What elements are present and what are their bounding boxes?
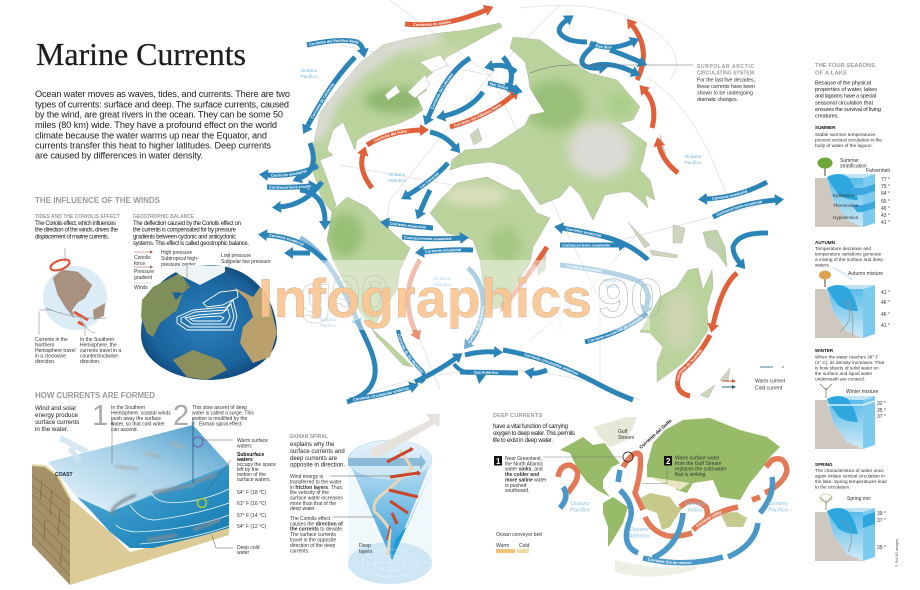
annotation: northern hemisphere: Northern [35,342,55,348]
block labels [236,438,276,556]
season: summer: Fahrenheit [866,168,891,174]
text: lake intro: ensures the survival of living [815,107,881,113]
text: Ekman explanation: explains why the [290,442,335,448]
annotation: southern hemisphere: currents travel in a [80,348,121,354]
map: conveyor belt: Gulf [618,429,628,435]
map: conveyor belt: Corriente cálida [696,511,722,528]
ocean labels: Atlántico [388,178,407,184]
text: lake intro: Because of the physical [815,80,871,86]
conveyor belt legend: Cold [519,543,530,549]
warm currents: Corriente de Australia [676,350,702,380]
world map: surface currents [258,0,784,404]
cold currents: Corriente del Labrador [431,73,454,109]
legend: force arrows: Low pressure [221,253,251,259]
panel: four seasons of a lake [815,63,899,567]
panel: influence of the winds [35,196,277,380]
watermark: 90 [597,267,663,329]
season: summer [815,125,891,227]
block labels: Subsurface [237,452,264,458]
text: deep currents intro: DEEP CURRENTS [493,413,542,419]
season: winter: the surface and liquid water [815,371,873,376]
season: winter [815,348,886,449]
text: Ekman explanation: the velocity of the [290,490,329,496]
cold currents: Corriente occidental de Australia [588,316,643,342]
season: spring: The characteristics of water once [815,468,884,473]
season: summer: stratification [840,164,867,170]
block labels: waters [237,444,252,450]
season: winter: 37 ° [877,414,886,420]
step 2: This slow ascent of deep [192,405,247,411]
season: autumn: 41 ° [881,323,890,329]
step 1: push away the surface [111,416,161,422]
cold currents: Oya Shio [596,44,612,49]
season: summer: prevent vertical circulation in the [815,138,882,142]
step 2: 2. [173,400,197,432]
callout 2: that is sinking. [675,472,707,478]
text: deep currents intro [493,413,575,444]
cold currents: Corriente ecuatorial [390,222,426,229]
step 2: Ekman spiral effect. [199,422,243,428]
conveyor belt legend: Warm [496,543,509,549]
map: conveyor belt: Índico [688,506,702,514]
cold currents: Corriente ecuatorial [271,169,307,177]
step 1: water, so that cold water [111,422,165,428]
cold currents: Mar Ártico [490,82,508,90]
season: winter: Winter mixture [846,389,878,395]
ocean labels: Pacífico [319,323,337,329]
ocean labels [300,68,702,329]
step 1 [92,400,171,433]
annotation: southern hemisphere [80,337,121,365]
warm currents: Corriente del Atlántico Norte [454,104,502,127]
step 1: Hemisphere, coastal winds [111,410,171,416]
watermark: Infographics [258,267,592,329]
season: summer: 55 ° [881,199,890,205]
text: deep currents intro: oxygen to deep water. This permits [493,431,575,437]
callout 2 [664,456,727,478]
season: autumn [815,240,890,338]
step 2 [173,400,254,432]
text: lake intro: and lagoons have a special [815,94,876,100]
intro text: Ocean water moves as waves, tides, and currents. There are two [35,89,290,99]
text: geostrophic balance [133,214,249,247]
map: conveyor belt: Pacífico [570,508,590,514]
subpolar arctic callout: CIRCULATING SYSTEM [697,70,754,76]
season: autumn: 46 ° [881,312,890,318]
intro text: by the wind, are great rivers in the ocean. They can be some 50 [35,110,283,120]
season: summer: Summer [840,158,859,164]
cold currents: Corriente del Pacífico Norte [309,39,359,46]
block labels: 61° F (16 °C) [237,501,267,507]
ocean labels: Océano [434,276,451,282]
text: tides and Coriolis effect [35,214,120,240]
legend: force arrows [134,250,271,291]
text: geostrophic balance: systems. This effect is called geostrophic balance. [133,241,249,247]
subpolar arctic callout: shown to be undergoing [697,90,753,96]
callout 2: Warm surface water [675,456,720,462]
text: Ekman explanation: opposite in direction. [290,462,345,468]
text: Ekman explanation: deep currents are [290,456,338,462]
cone diagram: layers [359,549,373,555]
block labels: 54° F (12 °C) [237,524,267,530]
legend: force arrows: Coriolis [134,255,151,261]
map legend [722,367,786,392]
warm currents: Corriente del Golfo [374,130,407,142]
callout 1: 1 [496,457,501,466]
legend: force arrows: gradient [134,275,153,281]
panel: how currents are formed: HOW CURRENTS ARE FORMED [35,391,155,400]
season: spring: Spring mix [847,496,871,502]
ocean labels: Océano [320,317,337,323]
block labels: 57° F (14 °C) [237,513,267,519]
legend: force arrows: High pressure [161,250,192,256]
cold currents: Corriente circumpolar antártica [353,387,409,401]
text: Ekman explanation: currents. [290,548,309,554]
legend: force arrows: Subtropical high- [161,256,199,262]
cold currents: Las Canarias [419,172,439,188]
watermark: g90 [300,266,390,324]
cold currents: Contracorriente ecuatorial [562,244,610,246]
annotation: northern hemisphere [35,337,76,365]
cold currents: Corriente de las Malvinas [398,334,424,373]
season: winter: WINTER [815,348,834,353]
map: conveyor belt: Océano [768,501,788,507]
text: tides and Coriolis effect: TIDES AND THE CORIOLIS EFFECT [35,214,120,220]
season: autumn: 41 ° [881,290,890,296]
cold currents: Corriente ecuatorial [566,228,602,238]
block labels: water [237,550,250,556]
season: spring: 39 ° [877,511,886,517]
season: summer: SUMMER [815,125,836,130]
map legend: Cold current [755,386,783,392]
conveyor belt legend [496,532,542,553]
callout 1: more saline water [505,478,547,484]
season: summer: Hypolimnion [833,215,859,220]
text: Ekman explanation: the currents to deviate. [290,526,343,532]
season: autumn: Temperature decrease and [815,246,871,251]
panel: deep currents [493,413,790,576]
season: summer: 75 ° [881,184,890,190]
text: Ekman explanation: direction of the deep [290,543,336,549]
legend: force arrows: Subpolar low pressure [221,259,271,265]
annotation: southern hemisphere: In the Southern [80,337,114,343]
text: Ekman explanation: transferred to the water [290,480,342,486]
season: spring: the lake. Spring temperatures lead [815,479,887,484]
annotation: southern hemisphere: Hemisphere, the [80,342,117,348]
season: summer: Thermocline [833,203,859,208]
text: wind and solar [35,405,79,433]
callout 1: the colder and [505,472,539,478]
block labels: left by the [237,467,259,473]
map: conveyor belt: Stream [618,435,634,441]
ocean labels: Océano [604,278,621,284]
season: summer: 46 ° [881,206,890,212]
legend: force arrows: Winds [134,285,148,291]
warm currents: Corrientes de Alaska [413,20,451,26]
season: winter: When the water reaches 39° F [815,354,879,360]
season: winter: is how sheets of solid water on [815,366,879,370]
text: Ekman explanation: more than that of the [290,501,336,507]
cold currents: Contracorriente ecuatorial [716,200,762,216]
text: Ekman explanation: deep water. [290,506,316,512]
cold currents: Corriente de California [311,84,334,118]
annotation: southern hemisphere: direction. [80,359,100,365]
text: tides and Coriolis effect: The Coriolis effect, which influences [35,221,116,227]
callout 1: water sinks, and [505,466,543,472]
text: Ekman explanation: The Coriolis effect [290,516,331,522]
annotation: northern hemisphere: in a clockwise [35,354,66,360]
intro text: are caused by differences in water density. [35,150,203,160]
panel: influence of the winds: THE INFLUENCE OF THE WINDS [35,196,161,205]
cold currents: Corriente ecuatorial [269,234,304,246]
text: Ekman explanation: travel in the opposite [290,538,336,544]
step 1: In the Southern [111,405,145,411]
season: winter: 35 ° [877,408,886,414]
conveyor belt legend: Ocean conveyor belt [496,532,542,538]
intro text [35,89,290,160]
title: Marine Currents [36,36,246,72]
season: winter: underneath are created. [815,376,865,382]
arctic islands [385,55,448,100]
text: geostrophic balance: The deflection caused by the Coriolis effect on [133,221,241,227]
map legend: Warm current [755,378,786,384]
callout 1: southward. [505,488,529,494]
text: wind and solar: energy produce [35,412,79,419]
cold currents: Corriente circumpolar antártica [524,354,578,376]
small globe illustration [39,248,107,336]
subpolar arctic callout: SUBPOLAR ARCTIC [697,64,754,70]
map: conveyor belt [543,417,790,576]
callout 1: is pushed [505,483,527,489]
white veil under watermark [258,260,650,330]
season: summer: 77 ° [881,177,890,183]
annotation: southern hemisphere: counterclockwise [80,354,118,360]
panel: Ekman spiral [290,414,440,584]
text: lake intro: properties of water, lakes [815,87,877,93]
copyright: © Sol 90 Images [895,539,899,567]
cone diagram: Deep [359,543,371,549]
season: summer: 43 ° [881,213,890,219]
ocean block diagram [32,418,233,585]
text: Ekman explanation: EKMAN SPIRAL [290,434,328,440]
callout 2: replaces the cold water [675,466,727,472]
season: summer: body of water of the lagoon. [815,143,873,148]
annotation: northern hemisphere: Hemisphere travel [35,348,76,354]
text: tides and Coriolis effect: the direction of the winds, drives the [35,228,119,234]
ocean labels: Océano [685,154,702,160]
text: Ekman explanation [290,434,345,554]
cone diagram [330,414,440,584]
subpolar arctic callout [530,64,756,103]
cold currents: Corriente ecuatorial [566,264,602,272]
ocean block diagram: COAST [55,472,72,478]
cold currents: Corriente ecuatorial [712,190,748,200]
text: Ekman explanation: The surface currents [290,532,336,538]
annotation: northern hemisphere: direction. [35,359,55,365]
block labels: Deep cold [237,545,260,551]
panel: how currents are formed [32,391,276,585]
subpolar arctic callout: For the last five decades, [697,78,756,84]
season: summer: 64 ° [881,191,890,197]
intro text: miles (80 km) wide. They have a profound effect on the world [35,120,277,130]
step 1: can ascend. [111,427,138,433]
season: spring: 37 ° [877,518,886,524]
cold currents [141,15,784,436]
text: Ekman explanation: causes the direction of [290,522,343,528]
season: autumn: a mixing of the surface and deep [815,257,883,262]
block labels: motion of the [237,472,266,478]
text: tides and Coriolis effect: displacement of marine currents. [35,234,109,240]
block labels: surface waters. [237,477,271,483]
step 2: water is called a surge. This [192,410,254,416]
text: deep currents intro: have a vital function of carrying [493,424,568,430]
legend: force arrows: force [134,261,145,267]
cold currents: Sea Antártica [474,370,498,374]
subpolar arctic callout: dramatic changes. [697,97,738,103]
cold currents: Corriente de Benguela [468,306,484,344]
text: geostrophic balance: the currents is compensated for by pressure [133,228,237,234]
callout 2: from the Gulf Stream [675,461,721,467]
season: spring: to the circulation. [815,484,850,490]
season: autumn: waters. [815,262,830,268]
text: lake intro: OF A LAKE [815,70,847,76]
map: conveyor belt: Pacífico [768,508,788,514]
map: conveyor belt: Corriente del Golfo [638,418,673,450]
season: spring [815,462,887,561]
season: spring: again initiate vertical circulation in [815,474,885,478]
season: winter: 32 ° [877,401,886,407]
text: lake intro: THE FOUR SEASONS [815,63,875,69]
intro text: types of currents: surface and deep. The surface currents, caused [35,100,289,110]
map: conveyor belt: Corriente fría de retorno [648,558,692,564]
legend: force arrows: pressure center [161,262,196,268]
ocean labels: Océano [389,172,406,178]
land masses [310,23,730,398]
season: summer: Stable summer temperatures [815,132,876,137]
callout 1: the North Atlantic [505,462,544,468]
callout 2: 2 [666,457,671,466]
block labels: Warm surface [237,438,268,444]
islands [470,95,730,398]
legend: force arrows: Pressure [134,269,154,275]
intro text: currents transfer this heat to higher latitudes. Deep currents [35,140,271,150]
map: conveyor belt: Océano [685,501,705,507]
text: wind and solar: Wind and solar [35,405,76,412]
text: Ekman explanation: surface currents and [290,449,345,455]
ocean labels: Océano [301,68,318,74]
callout 1 [494,456,547,494]
map: conveyor belt: Atlántico [627,534,650,540]
subpolar arctic callout: these currents have been [697,84,755,90]
big globe with gyre [141,252,277,380]
annotation: northern hemisphere: Currents in the [35,337,68,343]
map: conveyor belt: Océano [629,527,649,533]
season: spring: 39 ° [877,545,886,551]
season: summer: 41 ° [881,220,890,226]
ocean labels: Pacífico [684,160,702,166]
text: wind and solar: in the water. [35,426,69,433]
text: lake intro [815,63,881,120]
season: winter: (4° C), its density increases. That [815,360,885,365]
step 2: motion is modified by the [192,416,248,422]
season: autumn: Autumn mixture [848,271,883,277]
block labels: waters [236,457,253,463]
text: lake intro: creatures. [815,114,839,120]
text: Ekman explanation: in friction layers. Thus, [290,485,343,491]
season: summer: Epilimnion [833,193,855,198]
step 1: 1. [92,400,116,432]
callout 1: Near Greenland, [505,456,542,462]
text: lake intro: seasonal circulation that [815,100,873,106]
block labels: occupy the space [237,462,276,468]
ocean labels: Pacífico [300,74,318,80]
season: spring: SPRING [815,462,833,467]
warm currents [357,5,738,398]
map: conveyor belt: Océano [570,501,590,507]
text: geostrophic balance: GEOSTROPHIC BALANCE [133,214,195,220]
season: autumn: 46 ° [881,300,890,306]
season: autumn: AUTUMN [815,240,836,245]
season: autumn: temperature variations generate [815,252,882,256]
cold currents: Contracorriente ecuatorial [269,185,311,189]
text: deep currents intro: life to exist in deep water. [493,438,553,444]
ocean labels: Índico [606,283,619,290]
intro text: climate because the water warms up near the Equator, and [35,130,267,140]
text: geostrophic balance: gradients between cyclonic and anticyclonic [133,234,236,240]
ocean labels: Atlántico [433,282,452,288]
text: Ekman explanation: surface water increases [290,496,343,502]
text: Ekman explanation: Wind energy is [290,474,324,480]
block labels: 64° F (18 °C) [237,490,267,496]
cold currents: Contracorriente ecuatorial [404,236,452,240]
text: wind and solar: surface currents [35,419,79,426]
cold currents: Corriente ecuatorial [425,248,461,253]
